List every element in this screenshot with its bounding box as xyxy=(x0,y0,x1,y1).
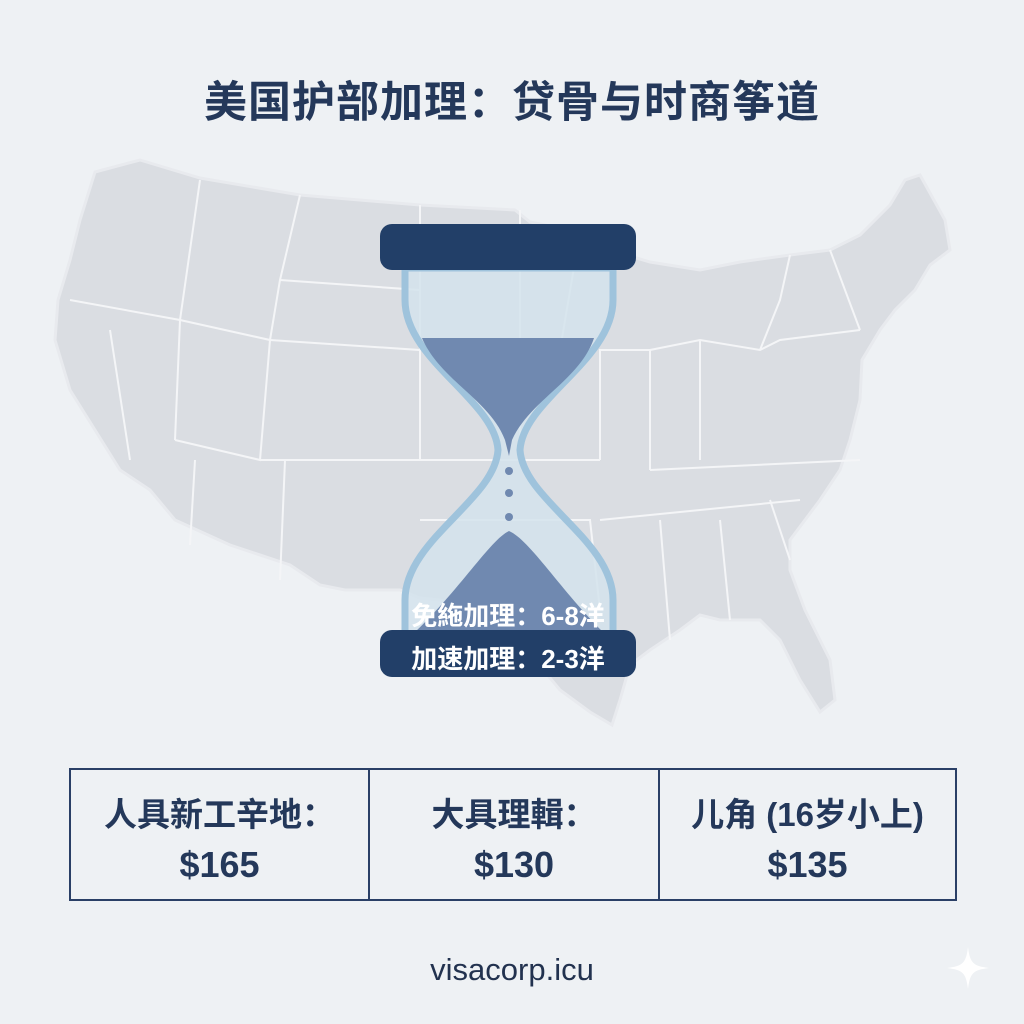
title: 美国护部加理：贷骨与时商筝道 xyxy=(204,79,820,127)
lower sand xyxy=(411,531,607,636)
falling sand dots xyxy=(505,467,513,521)
cell: first-time adult xyxy=(71,770,370,899)
cell: adult renewal: 大具理輯： xyxy=(432,796,596,833)
map and hourglass graphic xyxy=(56,162,948,723)
icon: sparkle xyxy=(949,949,987,988)
cell: adult renewal xyxy=(370,770,660,899)
icon: hourglass xyxy=(380,224,636,677)
cell: child xyxy=(691,796,924,885)
cell: first-time adult: $165 xyxy=(179,844,260,885)
text: expedited processing: 加速加理：2-3洋 xyxy=(411,644,605,674)
top cap xyxy=(380,224,636,270)
cell: child: $135 xyxy=(767,844,848,885)
cell: child: 儿角 (16岁小上) xyxy=(691,796,924,833)
cell: first-time adult: 人具新工辛地： xyxy=(104,796,335,833)
upper sand xyxy=(422,338,594,456)
cell: adult renewal: $130 xyxy=(474,844,554,885)
footer url: visacorp.icu xyxy=(430,952,594,987)
fee table xyxy=(69,768,957,901)
text: normal processing: 免絁加理：6-8洋 xyxy=(411,601,605,631)
map: US silhouette xyxy=(55,160,950,725)
hourglass glass xyxy=(405,268,613,640)
bottom cap xyxy=(380,630,636,677)
